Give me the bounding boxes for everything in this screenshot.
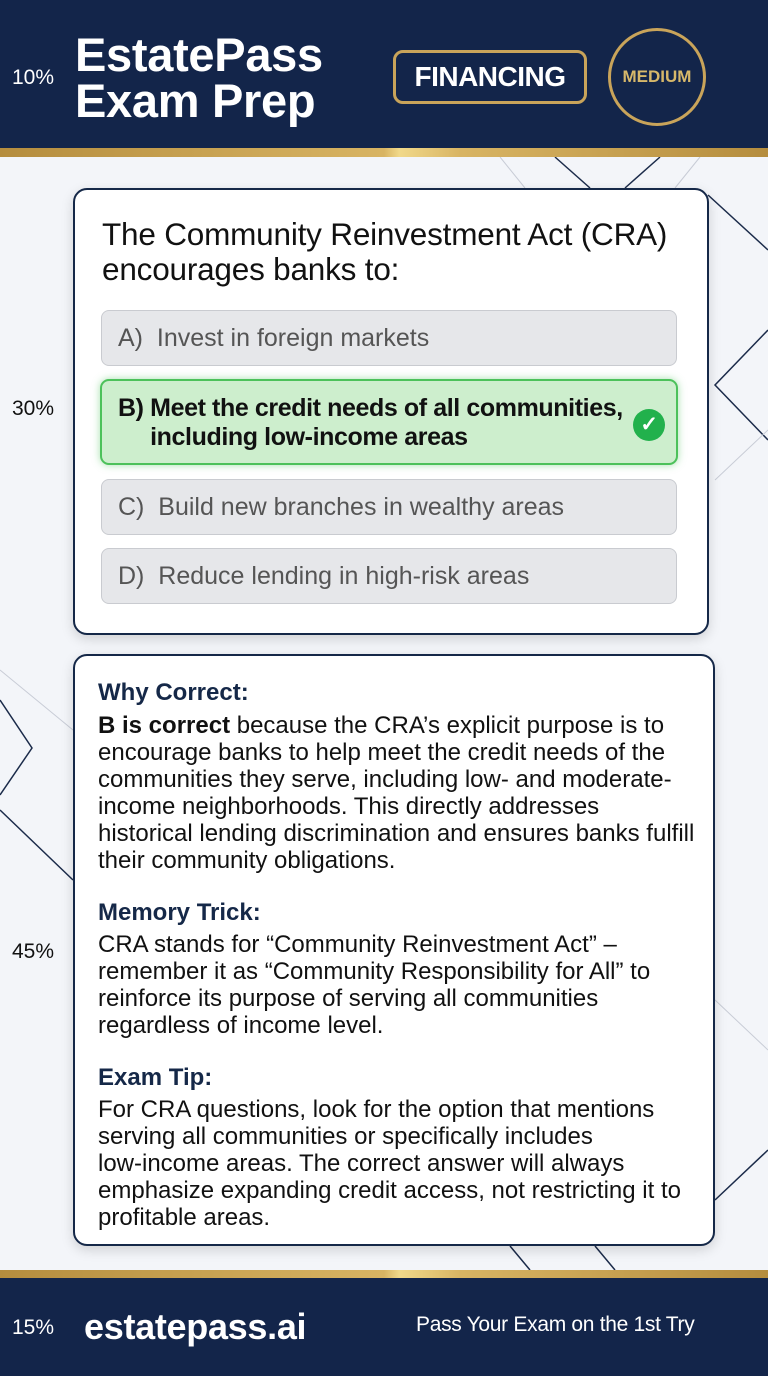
exam tip heading: Exam Tip: <box>98 1064 212 1091</box>
gold bar bottom <box>0 1270 768 1279</box>
memory trick text: remember it as “Community Responsibility for All” to <box>98 958 650 985</box>
question text: encourages banks to: <box>102 251 399 287</box>
memory trick text: regardless of income level. <box>98 1012 383 1039</box>
memory trick heading: Memory Trick: <box>98 899 261 926</box>
panel: explanation <box>73 654 715 1246</box>
option C <box>101 479 677 535</box>
option A <box>101 310 677 366</box>
option B correct: Meet the credit needs of all communities, <box>150 394 623 422</box>
exam tip text <box>98 1096 681 1231</box>
option D: D) Reduce lending in high-risk areas <box>118 562 529 590</box>
footer brand: estatepass.ai <box>84 1306 306 1347</box>
option C: C) Build new branches in wealthy areas <box>118 492 564 520</box>
why correct text: historical lending discrimination and ensures banks fulfill <box>98 820 694 847</box>
exam tip text: For CRA questions, look for the option that mentions <box>98 1096 654 1123</box>
icon: check: ✓ <box>640 413 658 436</box>
difficulty badge: MEDIUM <box>623 67 691 86</box>
question text: The Community Reinvestment Act (CRA) <box>102 216 667 252</box>
option B correct: including low-income areas <box>150 423 468 451</box>
option A: A) Invest in foreign markets <box>118 324 429 352</box>
header title <box>75 28 323 127</box>
gold bar top <box>0 148 768 157</box>
label 30%: 30% <box>12 397 54 420</box>
why correct text: income neighborhoods. This directly addresses <box>98 793 599 820</box>
panel: question <box>73 188 709 635</box>
label 10%: 10% <box>12 66 54 89</box>
exam tip text: serving all communities or specifically includes <box>98 1123 593 1150</box>
exam tip text: low-income areas. The correct answer will always <box>98 1150 624 1177</box>
header <box>0 0 768 150</box>
header title: EstatePass <box>75 28 323 81</box>
why correct text: communities they serve, including low- and moderate- <box>98 766 672 793</box>
label 15%: 15% <box>12 1316 54 1339</box>
option D <box>101 548 677 604</box>
why correct heading: Why Correct: <box>98 679 249 706</box>
question text <box>102 216 667 287</box>
why correct text <box>98 712 694 874</box>
memory trick text: CRA stands for “Community Reinvestment Act” – <box>98 931 617 958</box>
memory trick text <box>98 931 650 1039</box>
footer <box>0 1278 768 1376</box>
option B correct: B) <box>118 394 144 422</box>
category badge: FINANCING <box>414 61 566 92</box>
exam tip text: emphasize expanding credit access, not restricting it to <box>98 1177 681 1204</box>
category badge <box>393 50 587 104</box>
exam tip text: profitable areas. <box>98 1204 270 1231</box>
why correct text: B is correct because the CRA’s explicit purpose is to <box>98 712 664 739</box>
header title: Exam Prep <box>75 74 315 127</box>
label 45%: 45% <box>12 940 54 963</box>
footer tagline: Pass Your Exam on the 1st Try <box>416 1313 694 1336</box>
memory trick text: reinforce its purpose of serving all communities <box>98 985 598 1012</box>
difficulty badge <box>608 28 706 126</box>
why correct text: encourage banks to help meet the credit needs of the <box>98 739 665 766</box>
option B correct <box>100 379 678 465</box>
why correct text: their community obligations. <box>98 847 395 874</box>
icon: check <box>633 409 665 441</box>
